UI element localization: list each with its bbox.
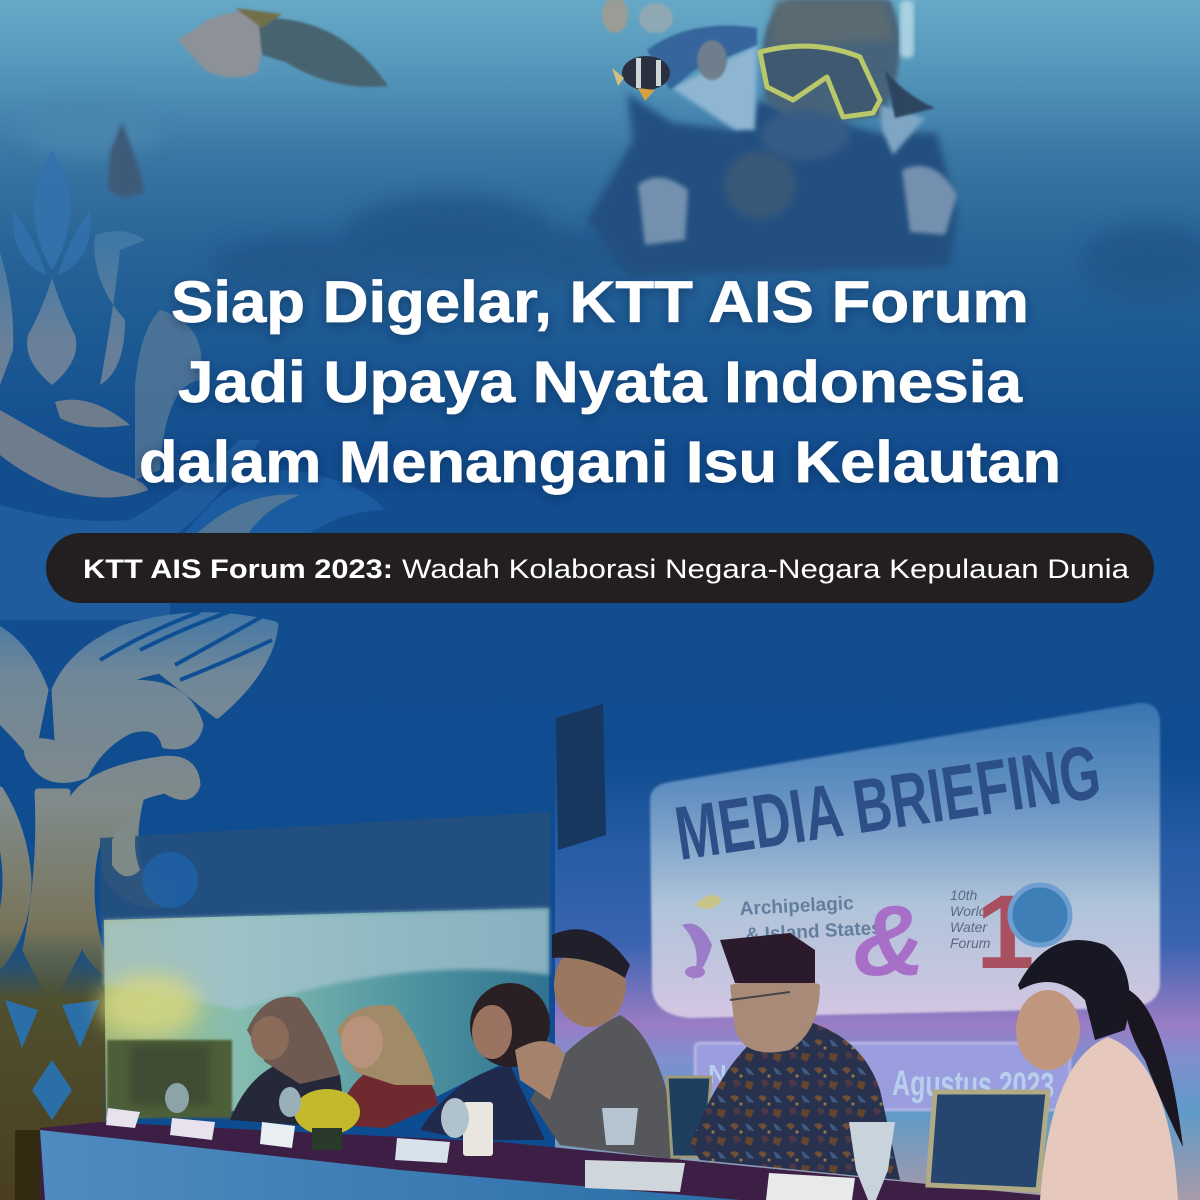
diver — [587, 0, 957, 277]
ampersand: & — [853, 885, 925, 997]
panelist 4 — [515, 929, 680, 1160]
left scroll — [0, 790, 28, 965]
small fish — [108, 122, 145, 198]
flowers — [294, 1089, 360, 1150]
right chair — [928, 1092, 1048, 1190]
left chair — [667, 1077, 711, 1157]
date banner: Nu — [708, 1059, 743, 1089]
world water forum logo — [950, 874, 1070, 991]
olive base — [0, 930, 105, 1200]
title: Jadi Upaya Nyata Indonesia — [178, 350, 1023, 415]
blue fish — [647, 26, 757, 90]
world water forum logo: World — [950, 903, 988, 919]
batik ornament lower — [0, 608, 275, 1000]
lower right scroll — [66, 759, 197, 975]
world water forum logo: 1 — [976, 874, 1034, 991]
projection screen — [100, 908, 549, 1120]
portrait frame — [556, 704, 606, 850]
batik ornament upper — [0, 150, 385, 620]
island states text: & Island States — [745, 918, 882, 946]
world water forum logo: Forum — [950, 935, 991, 951]
wings and feathers — [55, 616, 275, 740]
center scroll — [28, 683, 200, 780]
banner — [650, 703, 1160, 1018]
panelist 1 — [230, 997, 345, 1125]
chin — [760, 110, 850, 160]
body — [587, 93, 957, 277]
hood — [763, 0, 900, 128]
white shoulder left — [672, 45, 757, 130]
subtitle pill: KTT AIS Forum 2023: — [83, 554, 393, 584]
world water forum logo: Water — [950, 919, 988, 935]
clownfish — [612, 56, 670, 101]
hair — [885, 70, 935, 118]
torso — [724, 151, 796, 219]
ais logo — [682, 895, 722, 980]
panelist 2 — [335, 1005, 438, 1128]
subtitle pill — [46, 533, 1154, 603]
panelist 3 — [420, 983, 550, 1140]
diamonds — [5, 1000, 100, 1120]
subtitle pill: Wadah Kolaborasi Negara-Negara Kepulauan Dunia — [402, 554, 1130, 584]
panelist 5 — [690, 933, 900, 1180]
moderator — [1016, 940, 1183, 1200]
world water forum logo: 10th — [950, 887, 977, 903]
c scroll body — [112, 810, 140, 876]
date banner: Agustus 2023 — [892, 1062, 1055, 1106]
archipelagic text: Archipelagic — [739, 893, 855, 920]
c scroll end — [142, 852, 198, 908]
conference room photo — [0, 703, 1200, 1200]
pale fish group — [602, 0, 727, 80]
left hand — [638, 178, 688, 245]
title — [139, 270, 1061, 495]
table items — [106, 1083, 895, 1200]
dark panel — [100, 812, 550, 920]
right hand — [902, 166, 957, 235]
large fish — [178, 8, 388, 87]
c scroll — [105, 800, 173, 905]
hood top tint — [770, 0, 895, 45]
title: dalam Menangani Isu Kelautan — [139, 430, 1061, 495]
table with cloth — [40, 1122, 1090, 1200]
table shadow — [15, 1130, 43, 1200]
white strap — [900, 0, 914, 58]
diving mask — [760, 46, 880, 117]
date banner — [695, 1043, 1070, 1110]
center column — [26, 792, 78, 1000]
title: Siap Digelar, KTT AIS Forum — [171, 270, 1029, 335]
white shoulder right — [880, 105, 925, 155]
coral reef — [20, 105, 1200, 305]
room wall — [555, 760, 1200, 1200]
